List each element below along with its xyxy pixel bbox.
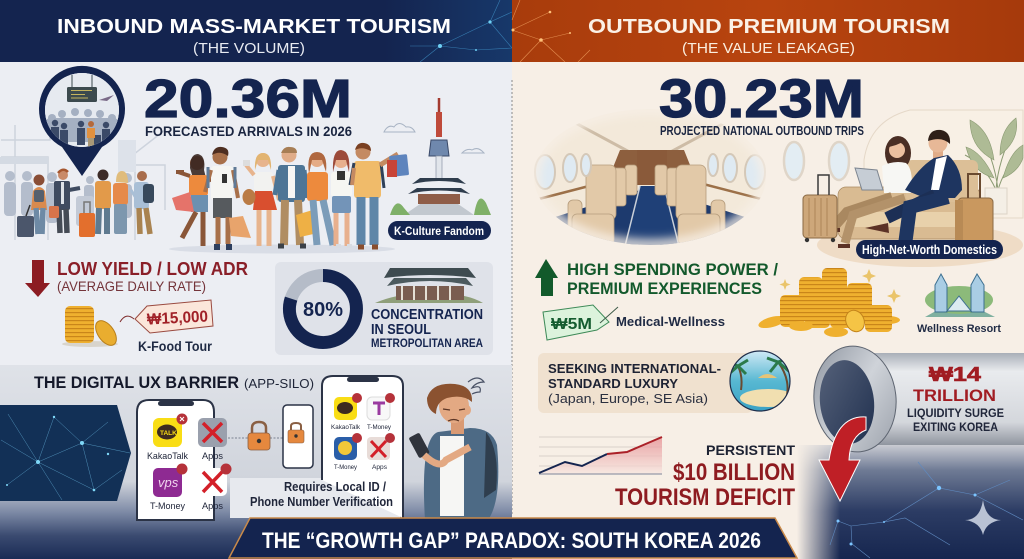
luggage left	[803, 175, 837, 242]
stat: 30.23M outbound: 30.23M	[659, 69, 864, 129]
text: liquidity surge	[907, 364, 1004, 434]
text: verification requirement: Phone Number Verification	[250, 495, 393, 509]
price tag: 15,000: ₩15,000	[147, 308, 209, 329]
panel: digital UX barrier background	[0, 365, 512, 559]
app: T-Money purple: T-Money	[150, 501, 185, 512]
callout: tourism deficit	[615, 442, 795, 511]
heading: digital UX barrier: THE DIGITAL UX BARRIER	[34, 373, 239, 392]
illustration: business cabin	[534, 116, 766, 245]
app: T-Money purple	[150, 464, 188, 512]
sparkles	[780, 269, 901, 303]
label: forecasted arrivals: FORECASTED ARRIVALS IN 2026	[145, 124, 352, 139]
traveller with backpack	[131, 171, 154, 234]
price tag: 5M	[543, 305, 618, 340]
footer banner	[229, 518, 797, 558]
label: medical-wellness: Medical-Wellness	[616, 315, 725, 329]
footer banner: THE “GROWTH GAP” PARADOX: SOUTH KOREA 2026	[262, 528, 761, 553]
app: blocked small: Apps	[372, 464, 388, 471]
heading: digital UX barrier: (APP-SILO)	[244, 376, 314, 391]
panel: inbound background	[0, 62, 512, 559]
icon: plant	[965, 118, 1023, 214]
icon: clouds	[384, 124, 484, 153]
text: concentration: CONCENTRATION	[371, 307, 483, 323]
tourist 2	[205, 147, 251, 250]
icon: beach circle	[728, 351, 796, 411]
illustration: tourists group	[169, 143, 409, 254]
tourist 5	[307, 152, 333, 245]
lounge windows	[784, 142, 849, 180]
icon: gold coin stacks	[757, 268, 900, 337]
icon: down arrow	[25, 260, 50, 297]
panel: international luxury: (Japan, Europe, SE Asia)	[548, 392, 708, 406]
label: projected outbound trips: PROJECTED NATIONAL OUTBOUND TRIPS	[660, 124, 864, 138]
luggage right	[955, 174, 993, 243]
app: blue small: T-Money	[334, 464, 358, 471]
label: wellness resort: Wellness Resort	[917, 323, 1001, 335]
icon: confusion squiggle	[468, 378, 484, 394]
panel: Seoul concentration	[275, 262, 493, 355]
title: outbound: OUTBOUND PREMIUM TOURISM	[588, 16, 950, 38]
illustration: confused tourist with phone	[409, 378, 498, 520]
label: K-Culture Fandom	[388, 221, 491, 240]
seat left	[568, 165, 637, 244]
title: inbound: INBOUND MASS-MARKET TOURISM	[57, 16, 451, 38]
app: blue small	[334, 433, 362, 471]
line chart: tourism deficit	[539, 437, 662, 474]
dotted connector	[228, 437, 284, 439]
illustration: lounge with couple	[784, 110, 1023, 267]
woman	[828, 136, 912, 246]
app: KakaoTalk	[147, 414, 188, 462]
app: KakaoTalk small	[331, 393, 362, 431]
traveller with suitcase	[17, 174, 47, 237]
cabin soft vignette edge	[534, 109, 766, 245]
header: inbound	[0, 0, 512, 62]
text: verification requirement	[250, 480, 393, 509]
illustration: leaking pipe	[809, 342, 1024, 501]
text: concentration	[371, 307, 483, 350]
app: KakaoTalk: TALK	[160, 430, 177, 437]
phone 2 with padlock	[283, 405, 313, 468]
white card under phones	[230, 478, 400, 518]
subheading: average daily rate: (AVERAGE DAILY RATE)	[57, 278, 206, 294]
icon: palace	[375, 268, 483, 303]
arrow: money flowing down	[819, 417, 866, 501]
app: KakaoTalk: KakaoTalk	[147, 451, 188, 462]
app: blocked small	[367, 433, 395, 471]
text: verification requirement: Requires Local ID /	[284, 480, 386, 494]
tourist 6	[331, 150, 352, 246]
callout: tourism deficit: $10 BILLION	[673, 459, 795, 486]
traveller in orange shirt	[95, 170, 111, 234]
icon: up arrow	[535, 259, 558, 296]
panel: international luxury: SEEKING INTERNATIONAL-	[548, 362, 721, 376]
label: K-Food Tour: K-Food Tour	[138, 338, 212, 354]
heading: high spending power: PREMIUM EXPERIENCES	[567, 279, 762, 298]
traveller in coral shirt	[113, 171, 128, 234]
app: blocked grey: Apps	[202, 451, 223, 462]
price tag: 15,000	[120, 300, 213, 333]
donut chart: 80%	[289, 276, 356, 342]
icon: coin stack	[62, 306, 121, 349]
man	[865, 130, 962, 245]
panel: outbound background	[512, 62, 1024, 559]
tourist 4	[275, 147, 318, 246]
label: High-Net-Worth Domestics: High-Net-Worth Domestics	[862, 243, 997, 257]
callout: tourism deficit: PERSISTENT	[706, 442, 795, 458]
background: lower right network area	[790, 445, 1024, 559]
group: travellers at airport	[17, 170, 154, 237]
icon: sparkle star	[965, 500, 1001, 535]
subtitle: value leakage: (THE VALUE LEAKAGE)	[682, 40, 855, 57]
app: KakaoTalk small: KakaoTalk	[331, 424, 361, 431]
network hexagon	[0, 405, 131, 501]
business traveller	[49, 170, 80, 233]
app: T-Money purple: vps	[158, 475, 179, 490]
header: outbound	[512, 0, 1024, 62]
cabin windows	[535, 154, 765, 189]
panel: international luxury: STANDARD LUXURY	[548, 377, 679, 391]
tourist 7	[350, 143, 409, 247]
panel: international luxury	[538, 353, 753, 413]
text: liquidity surge: ₩14	[929, 364, 982, 386]
app: T-Money small: T-Money	[367, 424, 392, 431]
heading: high spending power: HIGH SPENDING POWER /	[567, 260, 778, 279]
orange suitcase	[79, 202, 95, 237]
stat: 20.36M arrivals: 20.36M	[144, 69, 352, 129]
text: concentration: IN SEOUL	[371, 322, 431, 338]
seat right	[655, 165, 725, 244]
text: concentration: METROPOLITAN AREA	[371, 336, 483, 350]
subtitle: the volume: (THE VOLUME)	[193, 40, 305, 57]
phone 3 with apps	[322, 376, 403, 518]
app: T-Money small	[367, 393, 395, 431]
tourist 3	[242, 153, 279, 246]
dashed divider	[511, 80, 513, 515]
icon: wellness resort	[925, 274, 995, 317]
phone 1 with apps	[137, 400, 232, 520]
price tag: 5M: ₩5M	[551, 316, 592, 333]
label: High-Net-Worth Domestics	[856, 240, 1003, 259]
app: blocked white: Apps	[202, 501, 223, 512]
couch	[838, 160, 980, 239]
icon: airport map pin with crowd	[39, 66, 125, 176]
icon: N Seoul Tower and pagoda	[390, 98, 491, 215]
heading: low yield: LOW YIELD / LOW ADR	[57, 259, 248, 279]
heading: high spending power	[567, 260, 778, 298]
icon: padlock	[248, 422, 270, 450]
callout: tourism deficit: TOURISM DEFICIT	[615, 484, 795, 511]
background crowd silhouettes	[4, 171, 132, 226]
text: liquidity surge: EXITING KOREA	[913, 420, 998, 434]
donut chart: 80%: 80%	[303, 299, 343, 321]
text: liquidity surge: LIQUIDITY SURGE	[907, 406, 1004, 420]
airport background architecture	[0, 125, 165, 240]
label: K-Culture Fandom: K-Culture Fandom	[394, 224, 484, 238]
text: liquidity surge: TRILLION	[913, 386, 996, 405]
tourist 1	[172, 154, 220, 246]
heading: low yield	[57, 259, 248, 294]
